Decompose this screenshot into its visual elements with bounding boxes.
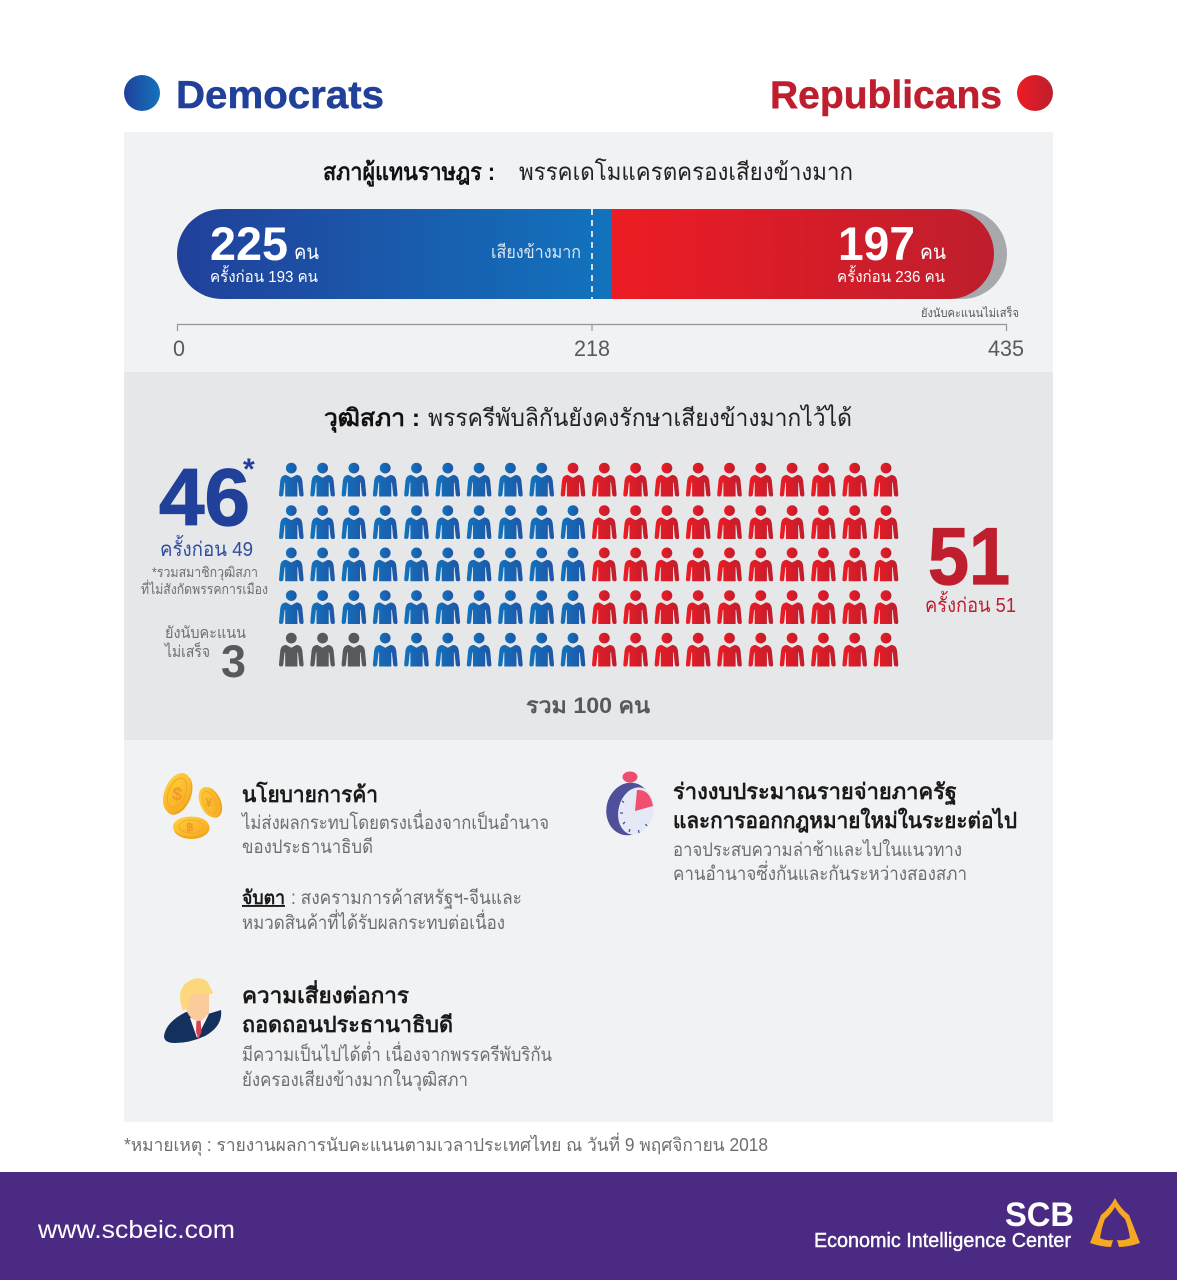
Democrat senate count: *รวมสมาชิกวุฒิสภา [152, 564, 258, 581]
Democrat senate count [141, 453, 268, 597]
icon: coins [157, 769, 227, 839]
Democrat senate count: * [243, 453, 255, 486]
budget block [673, 779, 1017, 885]
uncounted note: ยังนับคะแนนไม่เสร็จ [921, 305, 1019, 320]
icon: coins: ฿ [186, 820, 194, 834]
Republicans label: Republicans [770, 74, 1002, 117]
heading: Senate: วุฒิสภา : [324, 405, 420, 434]
trade policy block: จับตา [242, 888, 285, 909]
impeachment block: ยังครองเสียงข้างมากในวุฒิสภา [242, 1069, 468, 1092]
Democrats label: Democrats [176, 74, 384, 117]
seat axis: 435 [988, 336, 1024, 361]
seat axis: 0 [173, 336, 185, 361]
legend: Republicans [770, 74, 1053, 117]
majority label: เสียงข้างมาก [491, 242, 581, 262]
heading: House: พรรคเดโมแครตครองเสียงข้างมาก [519, 158, 853, 186]
legend: Democrats [124, 74, 384, 117]
trade policy block [240, 781, 549, 934]
budget block: คานอำนาจซึ่งกันและกันระหว่างสองสภา [673, 860, 967, 885]
Republican seats [837, 217, 946, 286]
icon: SCB logo [1090, 1198, 1140, 1247]
panel: House of Representatives [124, 132, 1053, 372]
icon: president portrait [164, 978, 221, 1043]
total senators: รวม 100 คน [526, 693, 650, 718]
Democrat seats [210, 217, 319, 286]
heading: House: สภาผู้แทนราษฎร : [323, 159, 495, 187]
heading: Senate [324, 404, 852, 434]
Republican seats: คน [920, 242, 946, 264]
Democrat senate count: ครั้งก่อน 49 [160, 535, 253, 561]
panel: Senate [124, 372, 1053, 740]
trade policy block: ไม่ส่งผลกระทบโดยตรงเนื่องจากเป็นอำนาจ [240, 809, 549, 834]
impeachment block: ความเสี่ยงต่อการ [242, 979, 409, 1008]
uncounted senate seats: ยังนับคะแนน [165, 625, 246, 642]
SCB wordmark: Economic Intelligence Center [814, 1230, 1071, 1252]
Democrat senate count: 46 [159, 453, 250, 543]
impeachment block [242, 979, 552, 1092]
Republican seats: ครั้งก่อน 236 คน [837, 265, 945, 286]
Republican senate count: 51 [928, 512, 1010, 602]
Democrat seats: คน [294, 242, 319, 264]
Democrat seats: ครั้งก่อน 193 คน [210, 265, 318, 286]
budget block: อาจประสบความล่าช้าและไปในแนวทาง [673, 839, 962, 861]
icon: coins: $ [171, 783, 183, 805]
SCB wordmark: SCB [1005, 1196, 1074, 1234]
trade policy block: นโยบายการค้า [242, 781, 378, 807]
panel: implications [124, 740, 1053, 1122]
icon: Republicans dot [1017, 75, 1053, 111]
icon: coins: ¥ [205, 795, 213, 810]
impeachment block: ถอดถอนประธานาธิบดี [242, 1012, 453, 1037]
budget block: และการออกกฎหมายใหม่ในระยะต่อไป [673, 807, 1017, 833]
heading: Senate: พรรครีพับลิกันยังคงรักษาเสียงข้างมากไว้ได้ [428, 404, 852, 432]
trade policy block: หมวดสินค้าที่ได้รับผลกระทบต่อเนื่อง [242, 909, 505, 934]
heading: House [323, 158, 853, 187]
seat axis [173, 324, 1024, 361]
icon: stopwatch [601, 772, 659, 840]
uncounted senate seats: 3 [221, 636, 246, 687]
footnote: *หมายเหตุ : รายงานผลการนับคะแนนตามเวลาประเทศไทย ณ วันที่ 9 พฤศจิกายน 2018 [124, 1132, 768, 1156]
SCB wordmark [814, 1196, 1074, 1252]
footer band [0, 1172, 1177, 1280]
uncounted senate seats: ไม่เสร็จ [163, 641, 210, 661]
seat bar [177, 209, 1007, 299]
icon: Democrats dot [124, 75, 160, 111]
pictogram: 100 senators [279, 463, 898, 666]
impeachment block: มีความเป็นไปได้ต่ำ เนื่องจากพรรครีพับริกัน [242, 1041, 552, 1066]
trade policy block: : สงครามการค้าสหรัฐฯ-จีนและ [291, 887, 522, 909]
trade policy block: ของประธานาธิบดี [242, 836, 373, 858]
budget block: ร่างงบประมาณรายจ่ายภาครัฐ [673, 779, 957, 806]
Democrat senate count: ที่ไม่สังกัดพรรคการเมือง [141, 580, 268, 597]
Democrat seats: 225 [210, 217, 288, 270]
website: www.scbeic.com [37, 1216, 235, 1244]
Republican seats: 197 [838, 217, 915, 270]
seat axis: 218 [574, 336, 610, 361]
uncounted senate seats [163, 625, 246, 687]
Republican senate count: ครั้งก่อน 51 [925, 591, 1016, 617]
